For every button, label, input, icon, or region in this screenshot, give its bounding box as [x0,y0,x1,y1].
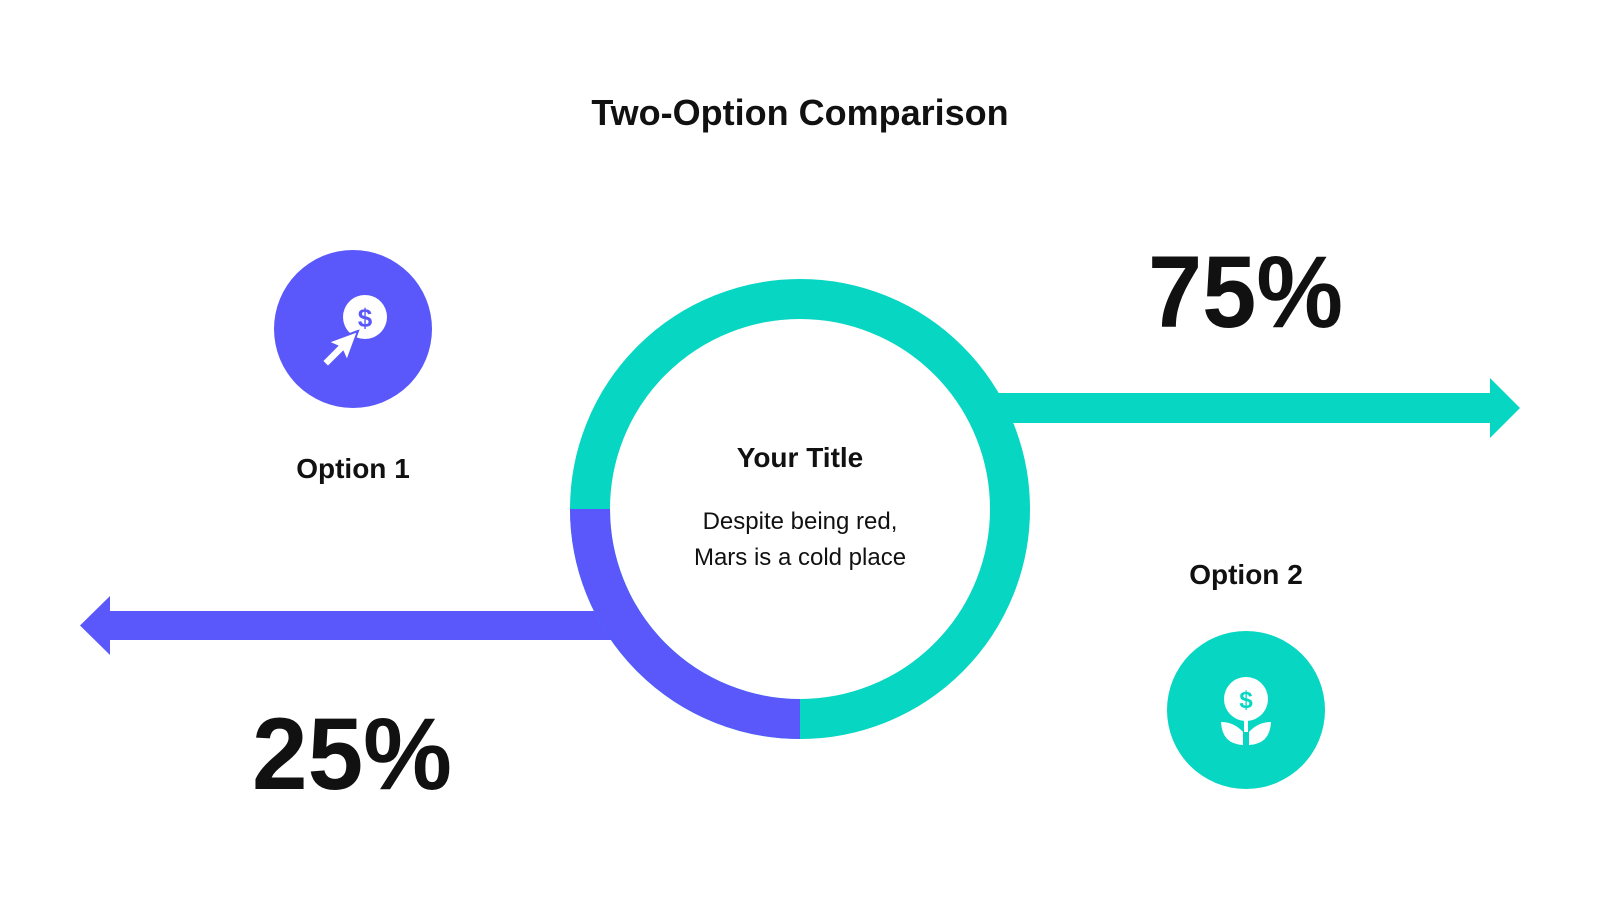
donut chart [590,299,1010,719]
center text [694,442,906,571]
icon: option 1 cursor coin [274,250,432,408]
icon: option 2 plant coin: $ [1239,687,1253,714]
center text: Mars is a cold place [694,544,906,571]
icon: option 1 cursor coin: $ [358,303,373,333]
label: option 1: Option 1 [296,453,410,484]
title: Two-Option Comparison [591,92,1009,133]
stat: 25%: 25% [252,697,452,811]
arrow: option 2 right [990,378,1520,438]
arrow: option 1 left [80,596,613,655]
center text: Despite being red, [703,508,897,535]
stat: 75%: 75% [1148,235,1343,349]
center text: Your Title [737,442,863,473]
label: option 2: Option 2 [1189,559,1303,590]
icon: option 2 plant coin [1167,631,1325,789]
